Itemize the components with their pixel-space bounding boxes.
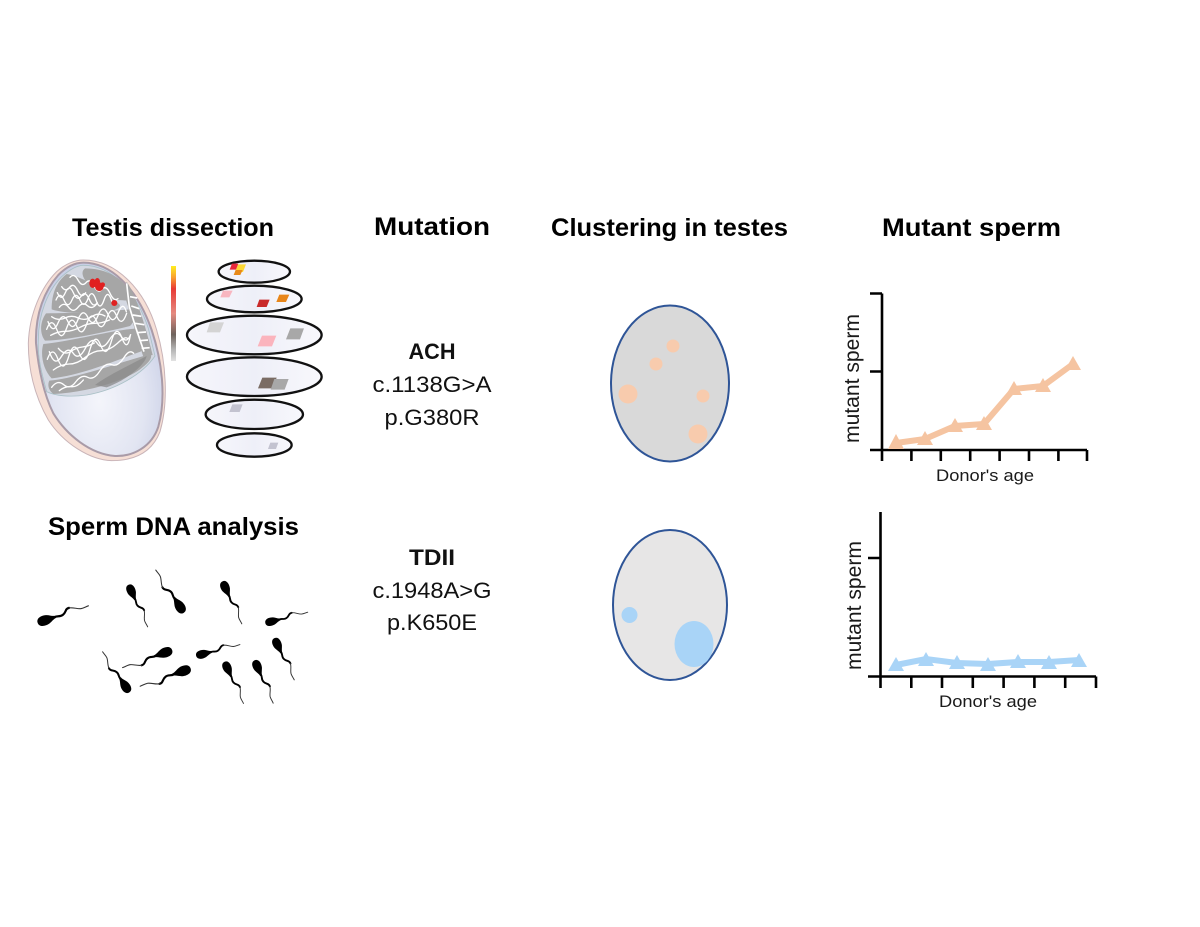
white tubule squiggles <box>47 276 134 391</box>
text block: ACH mutation <box>372 339 492 430</box>
text block: TDII mutation: p.K650E <box>387 610 477 635</box>
title: Mutant sperm: Mutant sperm <box>882 214 1061 242</box>
text block: ACH mutation: p.G380R <box>384 405 480 430</box>
lobes of seminiferous tubules <box>41 268 153 394</box>
text block: TDII mutation: TDII <box>409 545 455 570</box>
line chart: TDII mutant sperm vs donor age <box>843 512 1096 711</box>
title: Clustering in testes: Clustering in testes <box>551 214 788 242</box>
illustration: testis slices with coloured pieces <box>187 261 322 457</box>
line chart: TDII mutant sperm vs donor age: Donor's age <box>939 692 1037 711</box>
red mutant foci <box>89 278 117 306</box>
colour scale bar <box>171 266 176 361</box>
line chart: ACH mutant sperm vs donor age: mutant sperm <box>841 314 864 443</box>
illustration: scattered sperm cells <box>36 567 309 705</box>
illustration: testis cross-section <box>28 260 165 461</box>
line chart: ACH mutant sperm vs donor age <box>841 294 1087 485</box>
title: Sperm DNA analysis: Sperm DNA analysis <box>48 513 299 541</box>
text block: TDII mutation: c.1948A>G <box>372 578 492 603</box>
title: Mutation: Mutation <box>374 213 490 241</box>
text block: ACH mutation: c.1138G>A <box>372 372 492 397</box>
testis diagram: ACH clusters <box>611 306 729 462</box>
title: Testis dissection: Testis dissection <box>72 214 274 242</box>
line chart: TDII mutant sperm vs donor age: mutant sperm <box>843 541 866 670</box>
testis diagram: TDII clusters <box>613 530 727 680</box>
white vertical duct <box>127 283 150 352</box>
text block: TDII mutation <box>372 545 492 635</box>
text block: ACH mutation: ACH <box>408 339 456 364</box>
line chart: ACH mutant sperm vs donor age: Donor's age <box>936 466 1034 485</box>
